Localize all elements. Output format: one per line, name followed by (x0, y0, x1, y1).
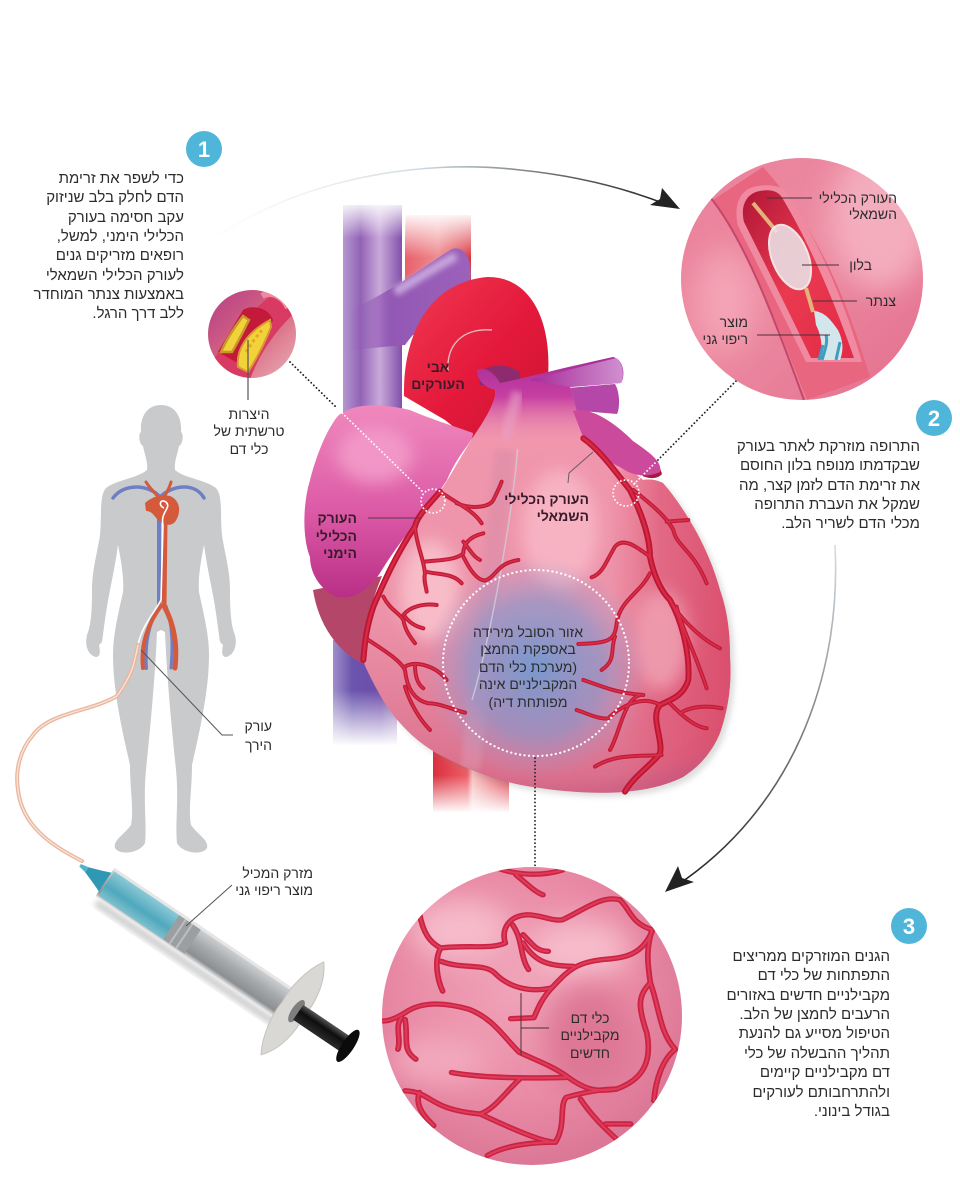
label: ischemic area: אזור הסובל מירידה (473, 624, 583, 640)
coronary vessels (363, 438, 722, 792)
right atrium (304, 405, 473, 598)
panel: heart illustration (304, 200, 735, 813)
dotted connector: plaque circle (290, 362, 445, 513)
label: right coronary artery (316, 510, 420, 561)
label: aorta (411, 359, 465, 392)
labels: balloon inset: בלון (849, 257, 872, 273)
text: step 2: התרופה מוזרקת לאתר בעורק (737, 438, 920, 455)
pulmonary trunk (471, 357, 623, 450)
text: step 3: התפתחות של כלי דם (758, 967, 890, 984)
text: step 3: תהליך ההבשלה של כלי (744, 1045, 890, 1062)
descending aorta upper (403, 212, 473, 335)
leader and label: plaque: טרשתית של (213, 423, 285, 439)
icon: syringe (49, 819, 384, 1096)
text: step 2: שמקל את העברת התרופה (754, 496, 920, 513)
badge: step 3: 3 (903, 914, 915, 939)
dotted circle: oxygen-poor area (443, 570, 629, 756)
heart body (362, 437, 735, 800)
badge: step 2 (916, 400, 952, 436)
badge: step 1: 1 (198, 137, 210, 162)
label: femoral artery: עורק (244, 718, 272, 734)
text: step 2 (737, 438, 921, 532)
badge: step 2: 2 (928, 406, 940, 431)
inferior vena cava (330, 640, 400, 746)
catheter in body (138, 501, 168, 645)
catheter tube (17, 645, 138, 861)
text: step 3: בגודל בינוני. (814, 1103, 890, 1120)
text: step 1: הדם לחלק בלב שניזוק (46, 189, 184, 206)
label: ischemic area (473, 624, 583, 710)
text: step 1: הכלילי הימני, למשל, (57, 228, 184, 245)
text: step 3: הטיפול מסייע גם להנעת (739, 1025, 890, 1042)
text: step 2: מכלי הדם לשריר הלב. (781, 515, 920, 532)
text: step 1: רופאים מזריקים גנים (56, 247, 184, 264)
label: right coronary artery: העורק (317, 510, 357, 526)
text: step 3 (727, 948, 890, 1120)
label: aorta: העורקים (411, 376, 465, 392)
text: step 1: לעורק הכלילי השמאלי (46, 267, 184, 284)
label: aorta: אבי (427, 359, 450, 375)
label: right coronary artery: הכלילי (316, 528, 357, 544)
labels: balloon inset: ריפוי גני (702, 331, 748, 347)
text: step 2: שבקדמתו מנופח בלון החוסם (740, 457, 920, 474)
leader and label: plaque: היצרות (229, 406, 269, 422)
dotted connector: balloon circle (613, 381, 736, 506)
labels: balloon inset (702, 190, 897, 347)
text: step 3: הרעבים לחמצן של הלב. (739, 1006, 890, 1023)
text: step 2: את זרימת הדם לזמן קצר, מה (739, 477, 921, 494)
text: step 3: מקבילניים חדשים באזורים (727, 987, 890, 1004)
badge: step 1 (186, 131, 222, 167)
leader and label: plaque: כלי דם (230, 441, 268, 457)
labels: balloon inset: מוצר (720, 314, 748, 330)
panel: balloon catheter inset (681, 150, 930, 400)
descending aorta lower (431, 740, 511, 813)
label: new vessels: מקבילניים (560, 1027, 620, 1043)
text: step 1 (34, 170, 184, 322)
icon: body silhouette with catheter route (86, 405, 236, 853)
labels: balloon inset: צנתר (866, 293, 896, 309)
badge: step 3 (891, 908, 927, 944)
label: syringe: מוצר ריפוי גני (235, 882, 313, 898)
labels: balloon inset: השמאלי (849, 206, 897, 222)
text: step 3: ולהתרחבותם לעורקים (753, 1084, 890, 1101)
text: step 3: הגנים המוזרקים ממריצים (733, 948, 890, 965)
label: new vessels: חדשים (570, 1045, 610, 1061)
label: right coronary artery: הימני (323, 545, 357, 561)
text: step 1: כדי לשפר את זרימת (59, 170, 184, 187)
leader and label: plaque (213, 340, 285, 457)
panel: atherosclerosis inset (208, 290, 300, 457)
text: step 1: עקב חסימה בעורק (68, 209, 184, 226)
label: ischemic area: המקבילניים אינה (479, 676, 577, 692)
pulmonary veins (568, 384, 619, 414)
label: left coronary artery: השמאלי (537, 508, 589, 524)
label: ischemic area: באספקת החמצן (480, 641, 576, 657)
text: step 3: דם מקבילניים קיימים (760, 1064, 890, 1081)
vessels in body (113, 482, 204, 668)
label: femoral artery: הירך (245, 737, 272, 753)
label: femoral artery (141, 650, 272, 753)
dotted connector: new vessels circle (534, 758, 536, 866)
arrow: step 2 to step 3 (665, 545, 836, 892)
arrow: step 1 to step 2 (218, 167, 680, 236)
labels: balloon inset: העורק הכלילי (819, 190, 897, 206)
small heart (145, 495, 179, 525)
label: ischemic area: מפותחת דיה) (489, 694, 567, 710)
label: left coronary artery: העורק הכלילי (504, 491, 589, 507)
text: step 1: ללב דרך הרגל. (92, 305, 184, 322)
aortic arch (404, 277, 548, 440)
label: syringe (186, 865, 313, 926)
left atrial appendage (573, 410, 662, 478)
right ventricle shadow (313, 576, 382, 664)
text: step 1: באמצעות צנתר המוחדר (34, 286, 184, 303)
label: ischemic area: (מערכת כלי הדם (479, 659, 577, 675)
label: syringe: מזרק המכיל (242, 865, 313, 881)
superior vena cava (340, 200, 471, 425)
label: new vessels (521, 993, 620, 1061)
panel: new collateral vessels inset (382, 867, 682, 1165)
label: new vessels: כלי דם (571, 1010, 609, 1026)
label: left coronary artery (504, 452, 593, 524)
